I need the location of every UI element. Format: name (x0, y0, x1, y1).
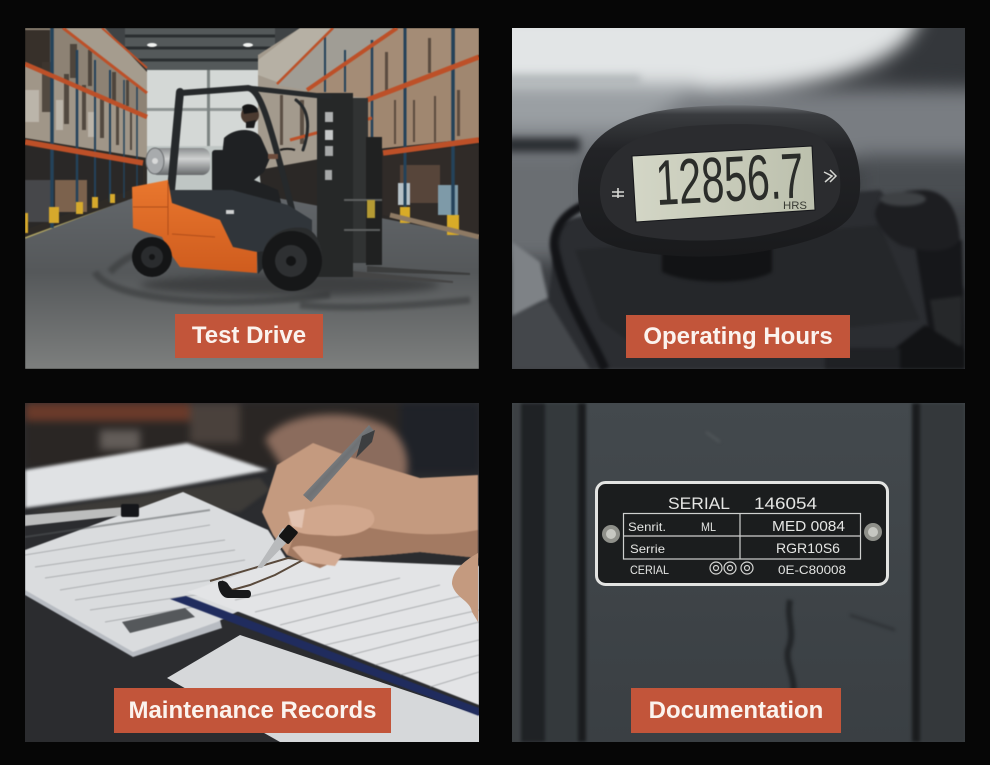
scratches (706, 432, 895, 700)
panel: documentation (512, 403, 965, 742)
serial plate (596, 482, 888, 584)
tyre marks (95, 244, 470, 307)
driver (212, 104, 295, 232)
panel: operating hours (512, 28, 965, 369)
label: documentation: Documentation (649, 697, 823, 724)
lower paper (167, 635, 479, 742)
label: test drive: Test Drive (192, 322, 306, 349)
clip (210, 558, 303, 598)
plate text: Serrie (630, 542, 665, 556)
left clipboard papers (25, 492, 300, 657)
left racking (25, 28, 147, 237)
forklift shadow (140, 274, 440, 296)
mast (317, 93, 382, 277)
forks (353, 266, 470, 283)
dash tray outline (554, 205, 605, 369)
plate text: 0E-C80008 (778, 565, 846, 577)
plate text: CERIAL (630, 565, 670, 577)
panel: maintenance records (25, 403, 479, 742)
hours reading: 12856.7 (654, 139, 806, 219)
hrs text: HRS (783, 200, 807, 212)
right racking (258, 28, 479, 237)
label: maintenance records: Maintenance Records (128, 697, 377, 724)
compliance marks (710, 562, 753, 574)
plate text: 146054 (754, 494, 817, 513)
forklift body (132, 180, 312, 274)
screws (602, 523, 882, 543)
front wheel (262, 227, 322, 291)
plate table (624, 514, 860, 559)
hand (262, 443, 478, 568)
gear knob (825, 190, 965, 369)
gas tank (146, 148, 210, 175)
warehouse floor (25, 193, 479, 369)
blurred background (25, 403, 480, 480)
plate text: SERIAL (668, 494, 730, 513)
label: test drive (175, 314, 323, 358)
warehouse ceiling and back wall (25, 28, 479, 198)
plate text: Senrit. (628, 520, 666, 534)
rear wheel (132, 237, 172, 277)
blurred dashboard background (490, 10, 990, 260)
cab frame (171, 88, 330, 213)
lcd display (632, 146, 815, 222)
plate text: ML (701, 520, 716, 534)
panel: test drive (25, 28, 479, 369)
label: operating hours: Operating Hours (643, 323, 833, 350)
icon right (824, 170, 836, 182)
gauge stem (662, 240, 772, 282)
label: maintenance records (114, 688, 391, 733)
forklift (132, 88, 470, 296)
main clipboard (170, 558, 479, 716)
label: operating hours (626, 315, 850, 358)
plate text: MED 0084 (772, 518, 845, 535)
back paper (25, 443, 268, 508)
pen (257, 425, 375, 568)
icon left (612, 188, 624, 198)
hour meter (578, 105, 860, 257)
plate text (628, 494, 846, 577)
right fingers (452, 553, 478, 622)
side channels (512, 403, 965, 742)
label: documentation (631, 688, 841, 733)
plate text: RGR10S6 (776, 540, 840, 556)
tray and lower dash (512, 190, 965, 369)
